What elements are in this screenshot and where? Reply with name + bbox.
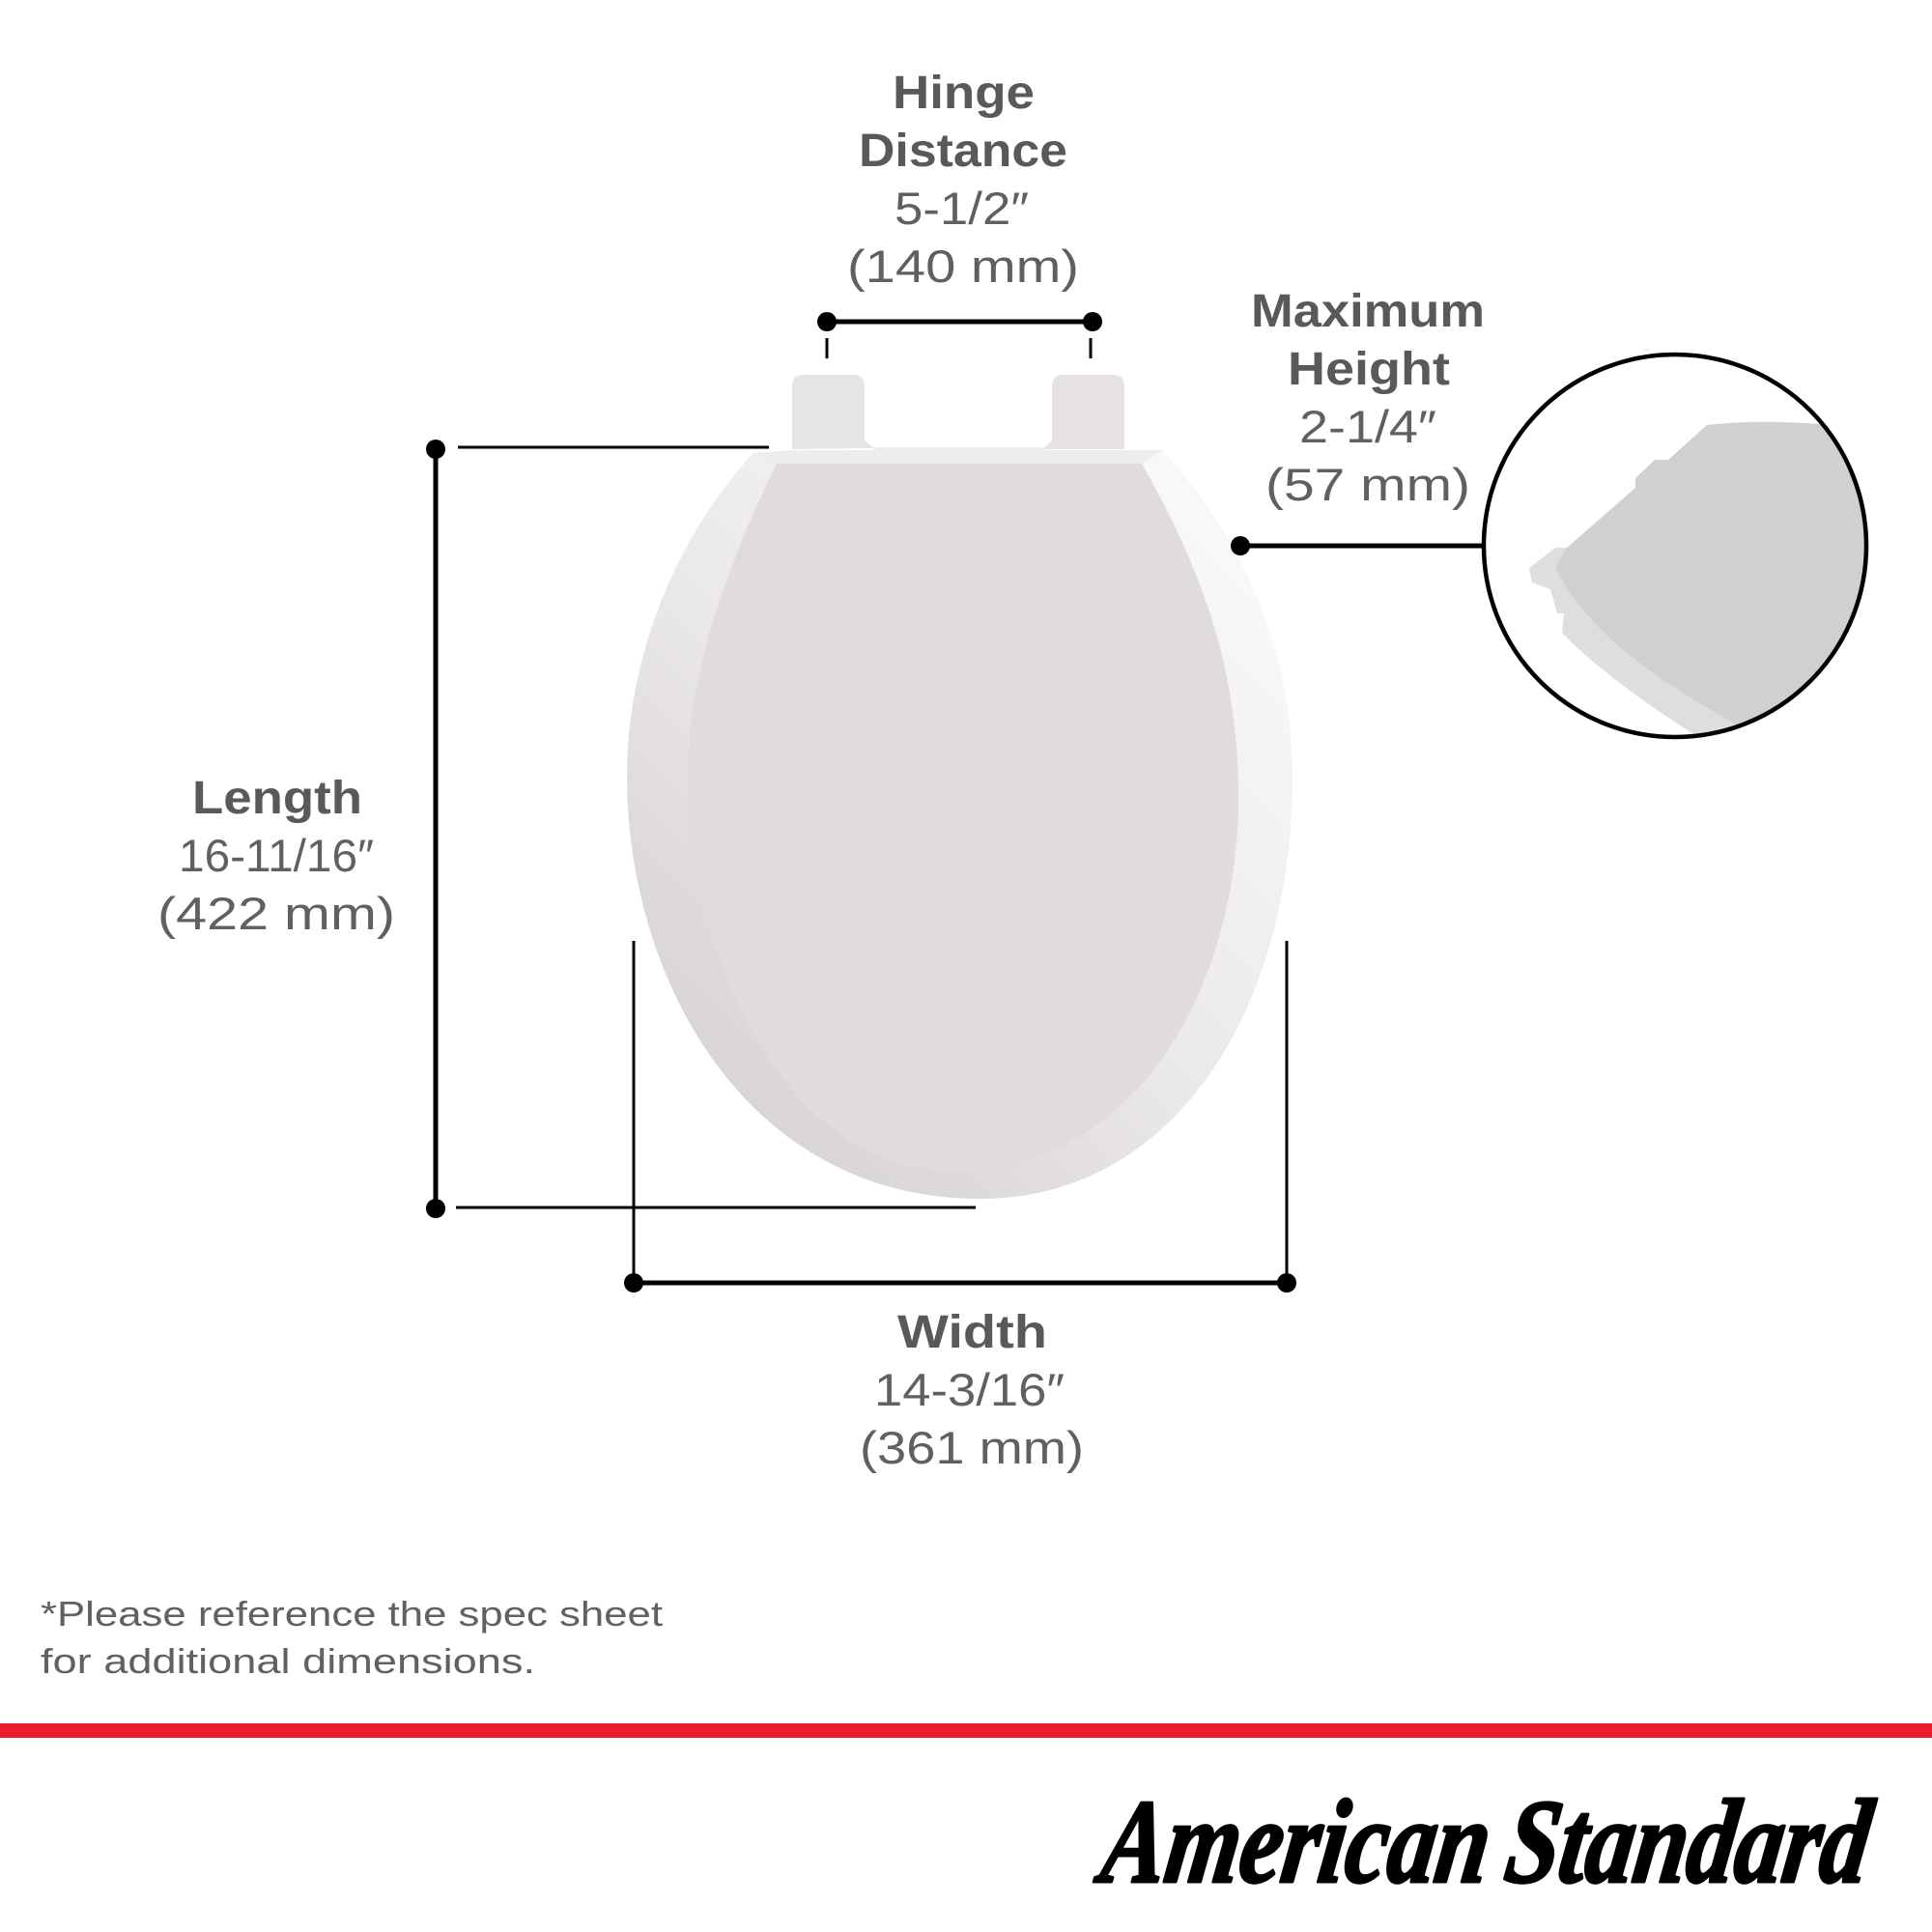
right hinge xyxy=(1043,375,1124,449)
label: hinge distance xyxy=(847,68,1079,292)
label: maximum height: Height xyxy=(1288,344,1450,395)
label: width: (361 mm) xyxy=(860,1422,1084,1473)
label: maximum height: (57 mm) xyxy=(1265,459,1470,510)
left hinge xyxy=(792,375,874,449)
label: maximum height xyxy=(1251,286,1485,510)
label: width: Width xyxy=(897,1307,1047,1358)
seat lid inner face xyxy=(688,464,1238,1171)
width dimension line xyxy=(624,941,1296,1293)
footnote: *Please reference the spec sheet xyxy=(41,1594,663,1634)
label: hinge distance: (140 mm) xyxy=(847,241,1079,292)
label: length: (422 mm) xyxy=(157,888,395,939)
hinge distance dimension line xyxy=(817,312,1102,358)
seat side view rim xyxy=(1529,548,1736,734)
length dimension line xyxy=(426,440,976,1218)
toilet seat illustration xyxy=(627,375,1293,1199)
seat side view body xyxy=(1555,421,1864,724)
hinge mounting strip xyxy=(753,447,1163,464)
label: hinge distance: Distance xyxy=(859,126,1067,177)
seat lid outer rim xyxy=(627,451,1293,1199)
label: length: 16-11/16″ xyxy=(179,830,374,881)
label: hinge distance: 5-1/2″ xyxy=(895,183,1029,234)
maximum height leader line xyxy=(1231,536,1484,555)
label: hinge distance: Hinge xyxy=(893,68,1035,119)
label: length xyxy=(157,773,395,939)
red divider bar xyxy=(0,1723,1932,1738)
brand logo: American xyxy=(1090,1776,1500,1908)
label: maximum height: Maximum xyxy=(1251,286,1485,337)
footnote: for additional dimensions. xyxy=(41,1641,535,1681)
label: length: Length xyxy=(192,773,362,824)
side view detail circle xyxy=(1482,352,1868,740)
footnote xyxy=(41,1594,663,1681)
brand logo xyxy=(1090,1776,1881,1908)
label: width: 14-3/16″ xyxy=(874,1364,1065,1415)
label: width xyxy=(860,1307,1084,1473)
label: maximum height: 2-1/4″ xyxy=(1299,401,1436,452)
